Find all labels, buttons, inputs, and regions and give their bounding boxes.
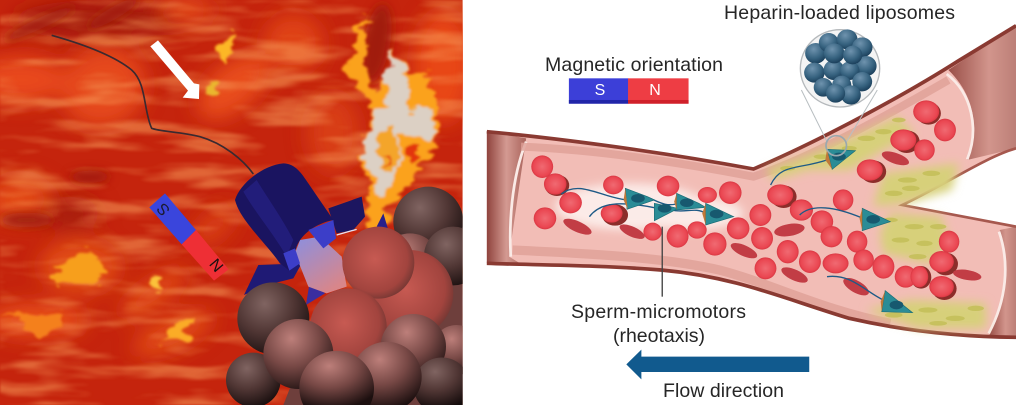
branched vessel bbox=[487, 25, 1016, 337]
swimming direction arrow bbox=[150, 40, 199, 99]
label: heparin-loaded liposomes: Heparin-loaded liposomes bbox=[724, 2, 955, 24]
label: flow direction: Flow direction bbox=[663, 380, 784, 402]
panel: blood vessel diagram bbox=[487, 25, 1016, 379]
magnet: S N bbox=[149, 193, 229, 281]
magnet: S N: S bbox=[154, 199, 174, 218]
vessel wall texture background bbox=[0, 0, 473, 405]
sperm flagellum bbox=[52, 35, 253, 174]
cluster of blood cells bbox=[226, 187, 483, 405]
micro-tube capsule bbox=[235, 163, 388, 305]
flow direction arrow bbox=[626, 350, 809, 379]
label: sperm-micromotors: Sperm-micromotors bbox=[571, 301, 746, 323]
magnet: S N: N bbox=[207, 255, 227, 274]
label: magnet S: S bbox=[595, 82, 605, 99]
rheotaxis leader line bbox=[660, 227, 664, 297]
bright streak highlights bbox=[0, 13, 438, 342]
magnet legend bbox=[569, 78, 689, 104]
liposome inset bbox=[800, 29, 880, 156]
label: magnet N: N bbox=[649, 82, 661, 99]
label: magnetic orientation: Magnetic orientation bbox=[545, 54, 723, 76]
label: rheotaxis: (rheotaxis) bbox=[613, 325, 705, 347]
plaque deposits bbox=[765, 117, 986, 328]
red blood cells bbox=[531, 100, 982, 300]
sperm micromotors bbox=[561, 149, 913, 313]
panel: micromotor in blood vessel bbox=[0, 0, 483, 405]
